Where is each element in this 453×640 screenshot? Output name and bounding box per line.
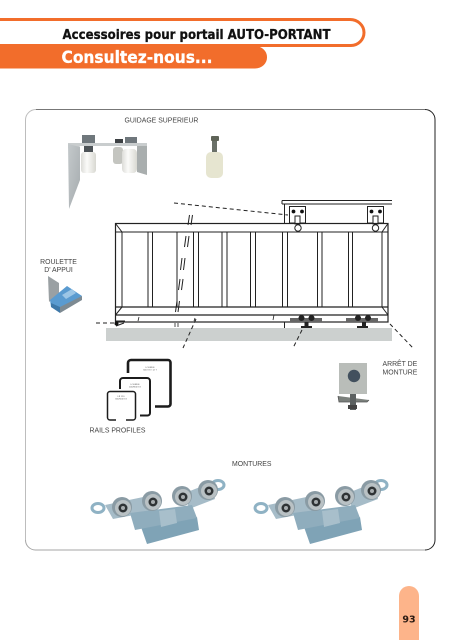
- subtitle: Consultez-nous...: [62, 48, 212, 68]
- label: guidage superieur: GUIDAGE SUPERIEUR: [124, 118, 198, 124]
- title: Accessoires pour portail AUTO-PORTANT: [62, 27, 331, 43]
- icon: top guide bracket with rollers: [68, 135, 147, 209]
- panel: accessories diagram: [26, 110, 435, 550]
- small rail: [108, 392, 136, 420]
- label: rails profiles: RAILS PROFILES: [90, 428, 146, 434]
- icon: single guide roller: [206, 136, 223, 178]
- page number tab: [399, 586, 419, 640]
- icon: carriage right: [255, 480, 387, 544]
- page number: 93: [402, 614, 416, 626]
- icon: carriage left: [92, 480, 224, 544]
- icon: rail profiles: 400/800 KG: [129, 386, 141, 388]
- icon: rail profiles: LOURDE: [130, 384, 140, 386]
- icon: frame stop: [338, 363, 369, 410]
- label: montures: MONTURES: [232, 461, 272, 468]
- label: arret de monture: [382, 359, 418, 376]
- icon: stop roller on gate: [114, 321, 125, 326]
- icon: rail profiles: 600 KG / 12 T: [143, 370, 157, 372]
- break marks: [176, 215, 192, 312]
- label: arret de monture: ARRÊT DE: [382, 359, 418, 368]
- large rail: [128, 360, 170, 406]
- icon: gate carriages on rail: [290, 315, 378, 328]
- label: roulette d'appui: D' APPUI: [44, 267, 73, 274]
- icon: rail profiles: [108, 360, 170, 420]
- gate elevation drawing: [106, 200, 392, 341]
- dashed leader lines: [96, 203, 413, 348]
- label: roulette d'appui: [40, 259, 77, 274]
- label: roulette d'appui: ROULETTE: [40, 259, 77, 266]
- icon: rail profiles: LOURDE: [145, 367, 155, 369]
- medium rail: [120, 378, 150, 416]
- icon: rail profiles: 300/500 KG: [115, 398, 127, 400]
- icon: rail profiles: LÉ 120: [118, 395, 125, 398]
- header: title band: [0, 20, 364, 69]
- icon: support roller: [48, 276, 82, 313]
- label: arret de monture: MONTURE: [382, 370, 418, 376]
